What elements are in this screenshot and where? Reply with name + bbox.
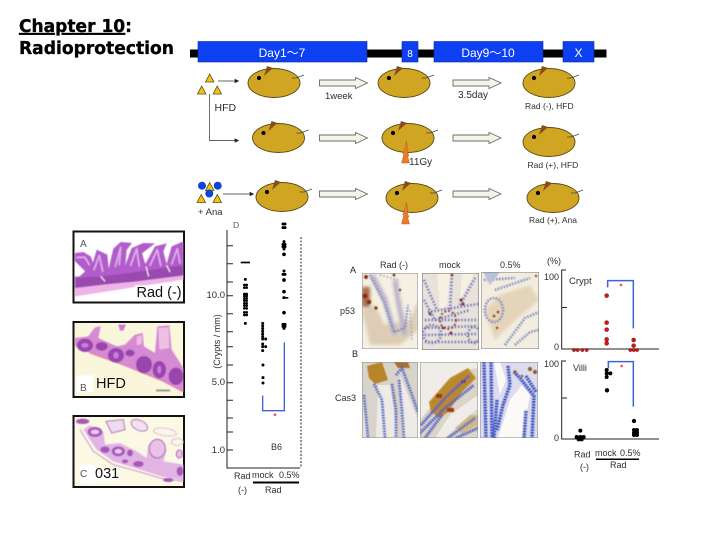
label: HFD: HFD	[214, 102, 236, 114]
label: Rad (-): Rad (-)	[136, 285, 182, 301]
axes	[227, 230, 301, 468]
chart labels: 0.5%	[620, 448, 641, 458]
chart: crypts per mm	[206, 220, 301, 495]
chart labels: 0	[554, 433, 559, 443]
schematic labels	[325, 90, 578, 225]
block arrows	[320, 78, 501, 200]
column headings: p53	[340, 306, 355, 316]
arrows from HFD to mice	[210, 79, 254, 196]
panel: micrograph A	[74, 232, 184, 302]
experiment schematic	[197, 66, 583, 225]
crypt dots	[572, 294, 639, 352]
mice	[248, 66, 583, 212]
chart labels: 100	[544, 272, 559, 282]
image: p53 mock	[422, 273, 480, 350]
chart labels	[206, 220, 300, 495]
column headings: Cas3	[335, 393, 356, 403]
chart labels: (Crypts / mm)	[212, 314, 222, 369]
significance brackets	[608, 281, 633, 407]
chart labels: 0	[554, 342, 559, 352]
data dots	[241, 222, 288, 416]
chart labels: Rad	[265, 485, 282, 495]
timeline bar: Day1～7	[259, 46, 306, 60]
timeline bar: 8	[407, 49, 413, 60]
column headings: mock	[439, 260, 461, 270]
chart labels: 0.5%	[279, 470, 300, 480]
image: p53 Rad(-)	[362, 273, 418, 349]
schematic labels: Rad (+), Ana	[529, 215, 577, 225]
chart labels: Crypt	[569, 276, 592, 287]
chart labels: 100	[544, 359, 559, 369]
schematic labels: 11Gy	[409, 157, 432, 168]
title	[19, 16, 174, 59]
chart labels: Rad	[610, 460, 627, 470]
panel: micrograph C	[74, 416, 184, 487]
label: A: A	[80, 239, 87, 250]
label: C: C	[80, 469, 87, 480]
icon: radiation bolts	[402, 141, 410, 224]
panel: micrograph B	[74, 322, 184, 397]
column headings	[335, 260, 521, 403]
timeline bar: X	[574, 46, 583, 60]
image: Cas3 Rad(-)	[362, 362, 418, 438]
title: Chapter 10:	[19, 16, 132, 37]
chart labels: D	[233, 220, 239, 230]
icon: HFD triangles	[198, 74, 222, 94]
image: p53 0.5%	[481, 272, 539, 349]
chart labels	[544, 256, 641, 472]
chart labels: B6	[271, 442, 282, 452]
icon: HFD plus Ana	[197, 182, 222, 202]
label: plus Ana: + Ana	[198, 207, 223, 218]
chart labels: mock	[252, 470, 274, 480]
column headings: 0.5%	[500, 260, 521, 270]
chart labels: Rad	[234, 471, 251, 481]
image: Cas3 mock	[420, 362, 478, 438]
timeline bar: Day9～10	[461, 46, 515, 60]
panel: immunostaining micrographs	[335, 260, 539, 438]
chart labels: 5.0	[212, 377, 225, 388]
chart labels: 1.0	[212, 445, 225, 456]
schematic labels: 3.5day	[458, 90, 488, 101]
label: B: B	[80, 383, 87, 394]
axes	[562, 270, 659, 439]
chart labels: Villi	[573, 363, 587, 373]
label: 031: 031	[95, 466, 119, 482]
column headings: Rad (-)	[380, 260, 408, 270]
chart labels: (-)	[580, 462, 589, 472]
schematic labels: 1week	[325, 91, 353, 102]
chart labels: (-)	[238, 485, 247, 495]
column headings: A	[350, 265, 356, 275]
villi dots	[575, 368, 639, 441]
schematic labels: Rad (-), HFD	[525, 101, 574, 111]
chart labels: Rad	[574, 450, 591, 460]
schematic labels: Rad (+), HFD	[528, 160, 578, 170]
chart labels: (%)	[547, 256, 561, 266]
image: Cas3 0.5%	[480, 362, 538, 438]
chart labels: 10.0	[206, 290, 225, 301]
title: Radioprotection	[19, 38, 174, 59]
column headings: B	[352, 349, 358, 359]
label: HFD: HFD	[96, 376, 126, 392]
timeline bar	[190, 42, 606, 62]
chart labels: mock	[595, 448, 617, 458]
chart: percent positive crypt and villi	[544, 256, 659, 472]
